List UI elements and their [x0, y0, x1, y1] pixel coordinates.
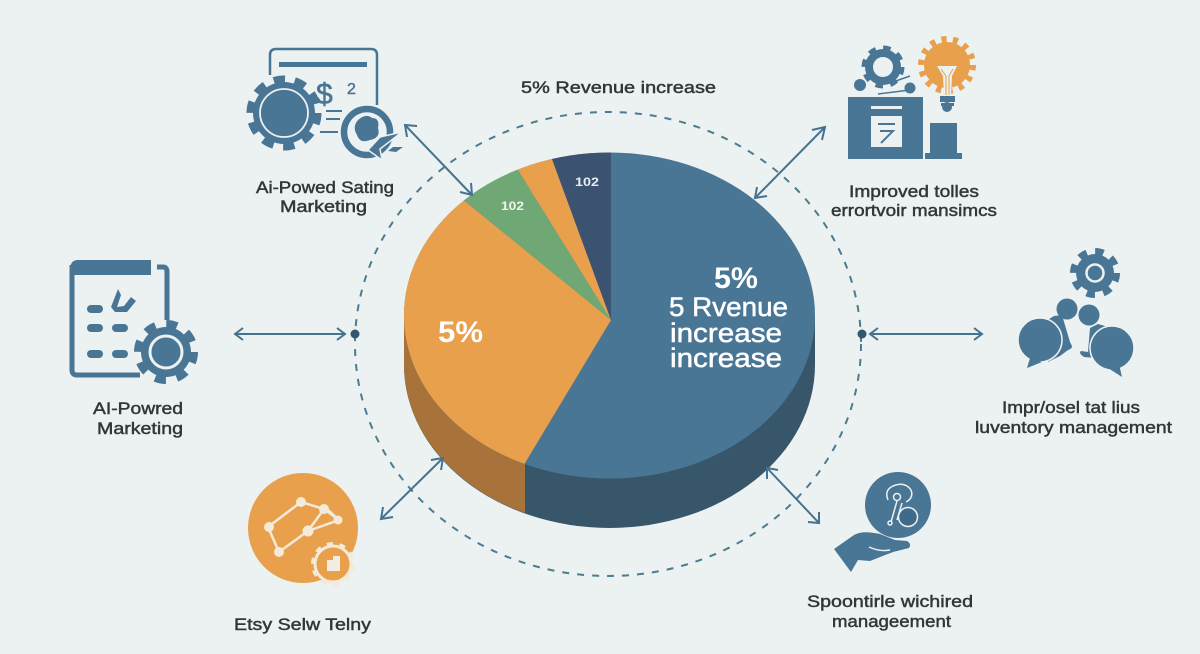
label: top right	[831, 183, 997, 220]
label: right: luventory management	[975, 419, 1172, 437]
label: right: Impr/osel tat lius	[1002, 399, 1140, 417]
arrow: right	[870, 328, 982, 340]
pie label: green slice: 102	[501, 201, 524, 213]
dot: left	[350, 330, 360, 338]
pie label: large blue slice: increase	[670, 318, 782, 348]
label: top right: errortvoir mansimcs	[831, 202, 997, 220]
dot: right	[858, 330, 866, 338]
pie label: large blue slice	[669, 262, 788, 373]
icon: gear and target document	[250, 49, 403, 160]
pie chart	[404, 152, 815, 528]
pie label: large blue slice: increase	[670, 343, 782, 373]
label: right	[975, 399, 1172, 437]
icon: gear, lightbulb and monitor	[848, 40, 972, 159]
icon: people chat and gear	[1018, 252, 1134, 377]
label: bottom right: manageement	[832, 613, 951, 631]
label: top left: Ai-Powed Sating	[256, 179, 394, 197]
label: left	[93, 400, 183, 438]
arrow: left	[235, 328, 345, 340]
label: left: AI-Powred	[93, 400, 183, 418]
icon: document with gear	[70, 260, 194, 380]
label: top left	[256, 179, 394, 216]
label: left: Marketing	[97, 420, 183, 438]
arrow: bottom left	[381, 458, 443, 519]
icon: gear and target document: $	[316, 78, 333, 111]
icon: orange network circle	[248, 473, 358, 584]
arrow: top left	[405, 125, 472, 195]
title: 5% Revenue increase	[521, 79, 716, 97]
pie label: large blue slice: 5%	[714, 262, 758, 295]
arrow: bottom right	[767, 468, 819, 523]
pie label: large blue slice: 5 Rvenue	[669, 292, 788, 322]
label: bottom right: Spoontirle wichired	[807, 593, 973, 611]
label: bottom left: Etsy Selw Telny	[234, 616, 372, 634]
label: top left: Marketing	[280, 198, 367, 216]
pie label: navy slice: 102	[575, 177, 599, 189]
icon: hand holding circle	[834, 472, 931, 572]
label: bottom right	[807, 593, 973, 631]
pie label: orange slice: 5%	[438, 316, 483, 349]
arrow: top right	[755, 127, 825, 198]
icon: gear and target document: 2	[347, 81, 356, 98]
label: top right: Improved tolles	[849, 183, 979, 201]
